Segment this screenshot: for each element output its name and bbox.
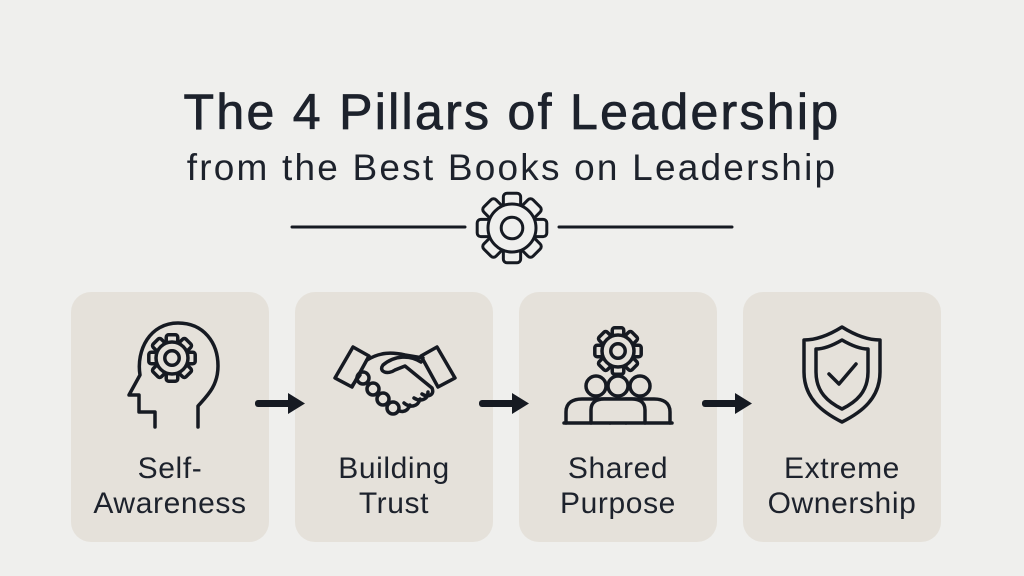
card: building trust: Trust (359, 487, 429, 520)
arrow 3 (702, 393, 752, 414)
card: building trust (295, 292, 493, 542)
card: self-awareness (71, 292, 269, 542)
card: self-awareness: Awareness (93, 487, 247, 520)
card: extreme ownership: Ownership (768, 487, 916, 520)
arrow 2 (479, 393, 529, 414)
icon: shield with check (804, 327, 880, 422)
card: shared purpose: Purpose (560, 487, 676, 520)
icon: handshake (335, 347, 455, 414)
card: extreme ownership: Extreme (784, 452, 900, 485)
arrow 1 (255, 393, 305, 414)
divider with gear (292, 193, 732, 263)
icon: head with gear (129, 323, 218, 427)
card: building trust: Building (338, 452, 450, 485)
card: self-awareness: Self- (138, 452, 202, 485)
icon: team with gear (564, 328, 672, 423)
title: The 4 Pillars of Leadership (184, 84, 840, 140)
subtitle: from the Best Books on Leadership (187, 147, 837, 188)
card: shared purpose: Shared (568, 452, 668, 485)
card: extreme ownership (743, 292, 941, 542)
card: shared purpose (519, 292, 717, 542)
